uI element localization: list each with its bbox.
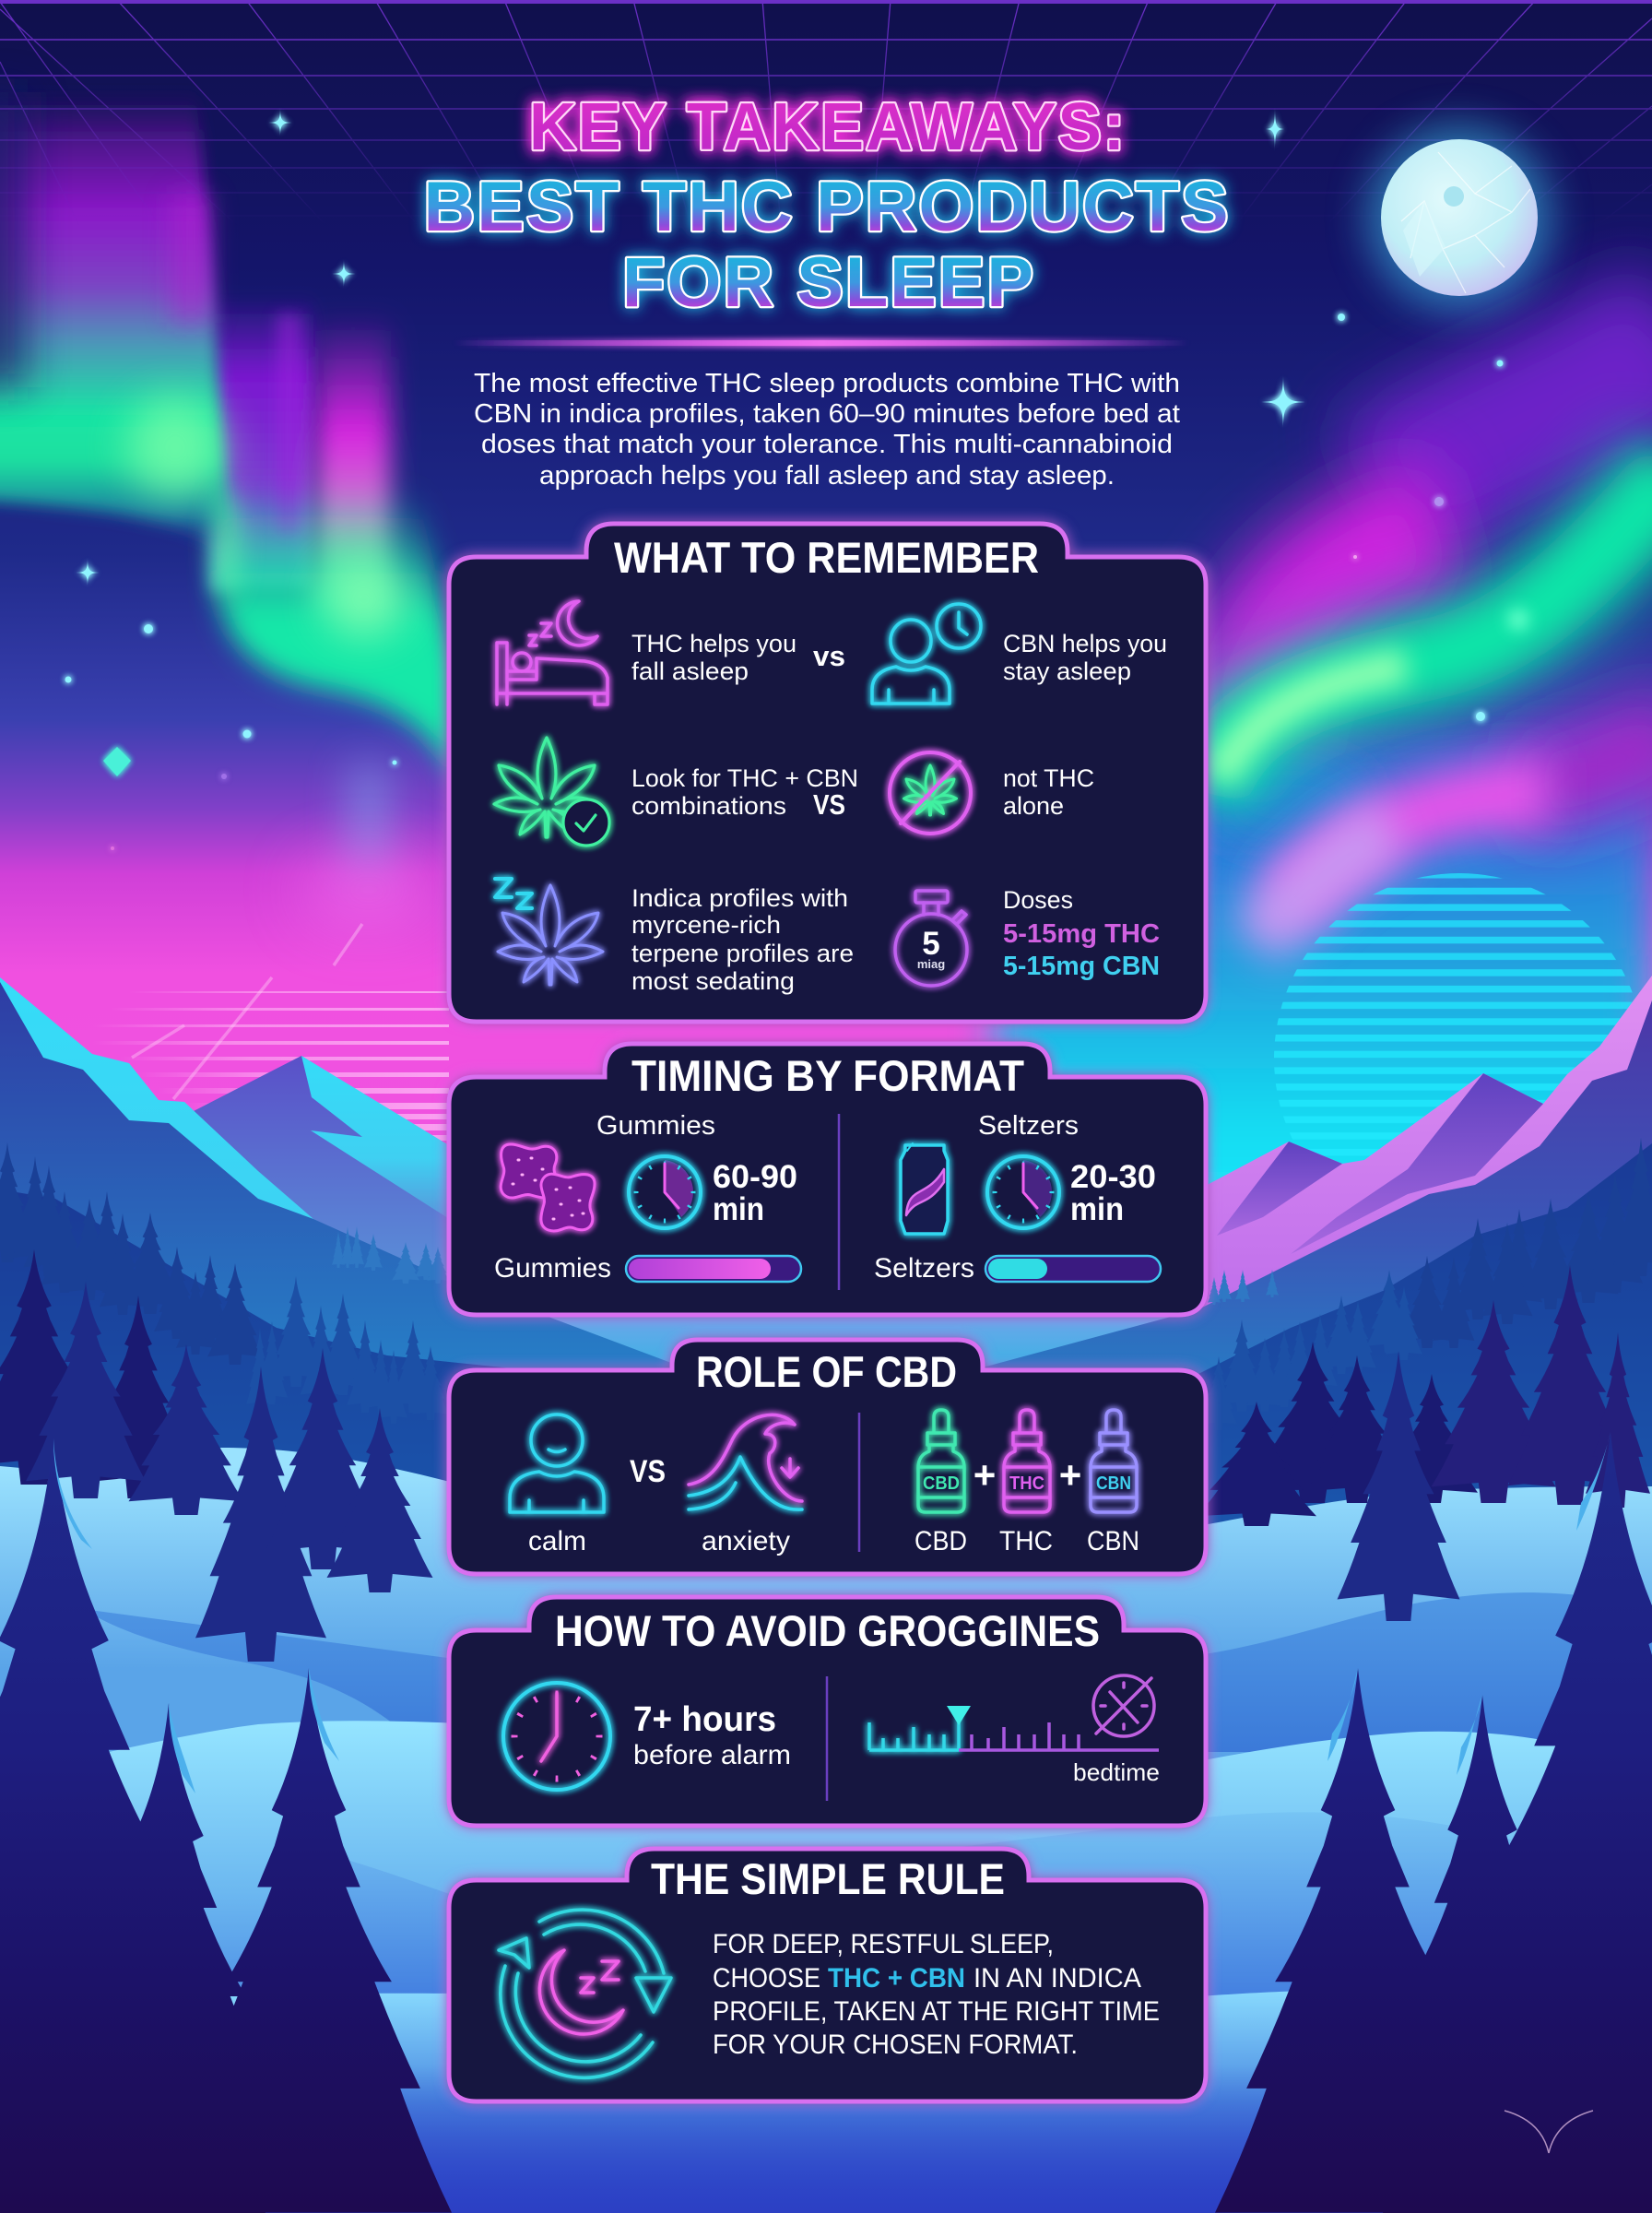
text: rule [713,1929,1160,2060]
icon: sleeping in bed [497,601,608,704]
vs label row two: VS [813,788,845,821]
label: seltzers column: Seltzers [978,1111,1079,1141]
icon: zz indica leaf [495,879,603,985]
icon: person with clock [872,604,981,704]
labels: cbd thc cbn: THC [999,1526,1053,1556]
text: rule: THC + CBN [828,1963,965,1994]
text: rule: FOR DEEP, RESTFUL SLEEP, [713,1929,1054,1959]
snow highlights on tree tips [53,1432,1611,1793]
intro paragraph [474,369,1180,491]
forest: dark back rows [0,1138,1652,1586]
heading: timing by format: TIMING BY FORMAT [631,1051,1024,1100]
bar: seltzers [874,1253,1161,1284]
icon: anxiety wave [689,1414,802,1509]
bar: gummies: Gummies [494,1253,611,1284]
icon: clock sixty to ninety [629,1156,701,1228]
text: look for thc + cbn combinations: Look for THC + CBN [631,764,858,792]
text: indica profiles: most sedating [631,967,795,995]
icon: stopwatch dose: 5 [922,926,940,962]
panel: what to remember [449,524,1206,1022]
icon: leaf with check [494,738,609,846]
title line: key takeaways: KEY TAKEAWAYS: [529,90,1127,164]
text: cbn helps you stay asleep: CBN helps you [1003,630,1167,657]
text: not thc alone: alone [1003,792,1064,820]
icon: cbn bottle: CBN [1096,1473,1131,1494]
right-hand cyan sky glow [996,738,1652,1291]
intro paragraph: approach helps you fall asleep and stay asleep. [539,461,1115,491]
label: gummies column: Gummies [596,1111,715,1141]
stars and sparkles [65,107,1503,850]
labels: calm and anxiety [528,1526,790,1556]
icon: thc bottle: THC [1009,1473,1044,1494]
text: look for thc + cbn combinations [631,764,858,820]
heading: the simple rule: THE SIMPLE RULE [651,1854,1005,1903]
text: indica profiles: terpene profiles are [631,940,854,967]
text: doses [1003,886,1160,981]
perspective grid [0,0,1652,207]
text: doses: 5-15mg CBN [1003,952,1160,981]
icon: seltzer can [901,1143,948,1234]
icon: thc bottle [1004,1410,1050,1512]
text: rule: IN AN INDICA [974,1963,1141,1994]
icon: clock twenty to thirty [987,1156,1059,1228]
horizon stripes and shooting streaks [92,924,449,1141]
labels: calm and anxiety: calm [528,1526,586,1556]
mountains: left [0,977,701,1475]
heading: role of cbd: ROLE OF CBD [696,1347,957,1396]
text: not thc alone [1003,764,1094,820]
heading: what to remember: WHAT TO REMEMBER [614,533,1039,582]
text: doses: 5-15mg THC [1003,919,1160,949]
giant foreground trees [0,1429,1652,2213]
text: seven plus hours before alarm [633,1700,791,1770]
valley haze behind the panels [433,1226,1226,1392]
labels: calm and anxiety: anxiety [702,1526,790,1556]
intro paragraph: The most effective THC sleep products combine THC with [474,369,1180,398]
icon: no leaf [890,752,971,834]
icon: stopwatch dose: miag [917,957,945,971]
text: cbn helps you stay asleep [1003,630,1167,685]
bar: gummies [494,1253,801,1284]
text: indica profiles: Indica profiles with [631,884,848,912]
text: doses: Doses [1003,886,1073,914]
title [424,90,1230,322]
panel: timing by format [449,1044,1206,1315]
labels: cbd thc cbn: CBN [1087,1526,1139,1556]
text: look for thc + cbn combinations: combinations [631,792,786,820]
intro paragraph: CBN in indica profiles, taken 60–90 minutes before bed at [474,399,1180,429]
text: thc helps you fall asleep: THC helps you [631,630,796,657]
text: twenty to thirty min: 20-30 [1070,1159,1156,1195]
vs label row one: vs [813,640,845,672]
bottom-right faint star [1504,2111,1593,2153]
labels: cbd thc cbn: CBD [914,1526,967,1556]
title line: best thc products: BEST THC PRODUCTS [424,168,1230,246]
text: thc helps you fall asleep: fall asleep [631,657,749,685]
panel: role of cbd [449,1340,1206,1574]
bar: seltzers: Seltzers [874,1253,974,1284]
text: rule: FOR YOUR CHOSEN FORMAT. [713,2030,1078,2060]
icon: cbd bottle [918,1410,964,1512]
icon: crossed-out clock [1093,1675,1154,1736]
icon: stopwatch dose [895,891,967,986]
aurora: right curtain [1208,332,1652,941]
panel: how to avoid grogginess [449,1597,1206,1826]
icon: wall clock [503,1683,610,1790]
icon: sleep cycle [499,1910,671,2077]
text: seven plus hours before alarm: 7+ hours [633,1700,776,1739]
distant pale trees [332,1226,1279,1305]
label: bedtime: bedtime [1073,1758,1160,1786]
moon [1367,125,1552,310]
divider under title [453,340,1190,346]
icon: cbn bottle [1091,1410,1137,1512]
text: sixty to ninety min: min [713,1191,764,1227]
icon: cbd bottle: CBD [923,1473,960,1494]
plus: + [974,1453,996,1497]
text: twenty to thirty min: min [1070,1191,1124,1227]
text: not thc alone: not THC [1003,764,1094,792]
mountains: right [959,976,1652,1438]
aurora: left curtain [0,92,461,917]
icon: calm person [510,1414,604,1512]
text: sixty to ninety min: 60-90 [713,1159,797,1195]
text: cbn helps you stay asleep: stay asleep [1003,657,1131,685]
mid trees on snow [0,1249,1650,1662]
text: thc helps you fall asleep [631,630,796,685]
panel: the simple rule [449,1849,1206,2101]
text: twenty to thirty min [1070,1159,1156,1227]
vs label: VS [630,1454,666,1489]
text: seven plus hours before alarm: before alarm [633,1740,791,1770]
intro paragraph: doses that match your tolerance. This multi-cannabinoid [481,430,1173,459]
labels: cbd thc cbn [914,1526,1139,1556]
snow hills [0,1448,1652,2213]
text: indica profiles: myrcene-rich [631,911,781,939]
icon: gummies [501,1144,595,1231]
text: rule: CHOOSE [713,1963,820,1994]
text: rule: PROFILE, TAKEN AT THE RIGHT TIME [713,1996,1160,2027]
heading: how to avoid groggines: HOW TO AVOID GROGGINES [555,1606,1100,1655]
plus: + [1059,1453,1081,1497]
striped retro sun [1274,873,1633,1155]
text: indica profiles [631,884,854,995]
chart: bedtime timeline [869,1675,1160,1786]
text: sixty to ninety min [713,1159,797,1227]
title line: for sleep: FOR SLEEP [622,243,1035,322]
